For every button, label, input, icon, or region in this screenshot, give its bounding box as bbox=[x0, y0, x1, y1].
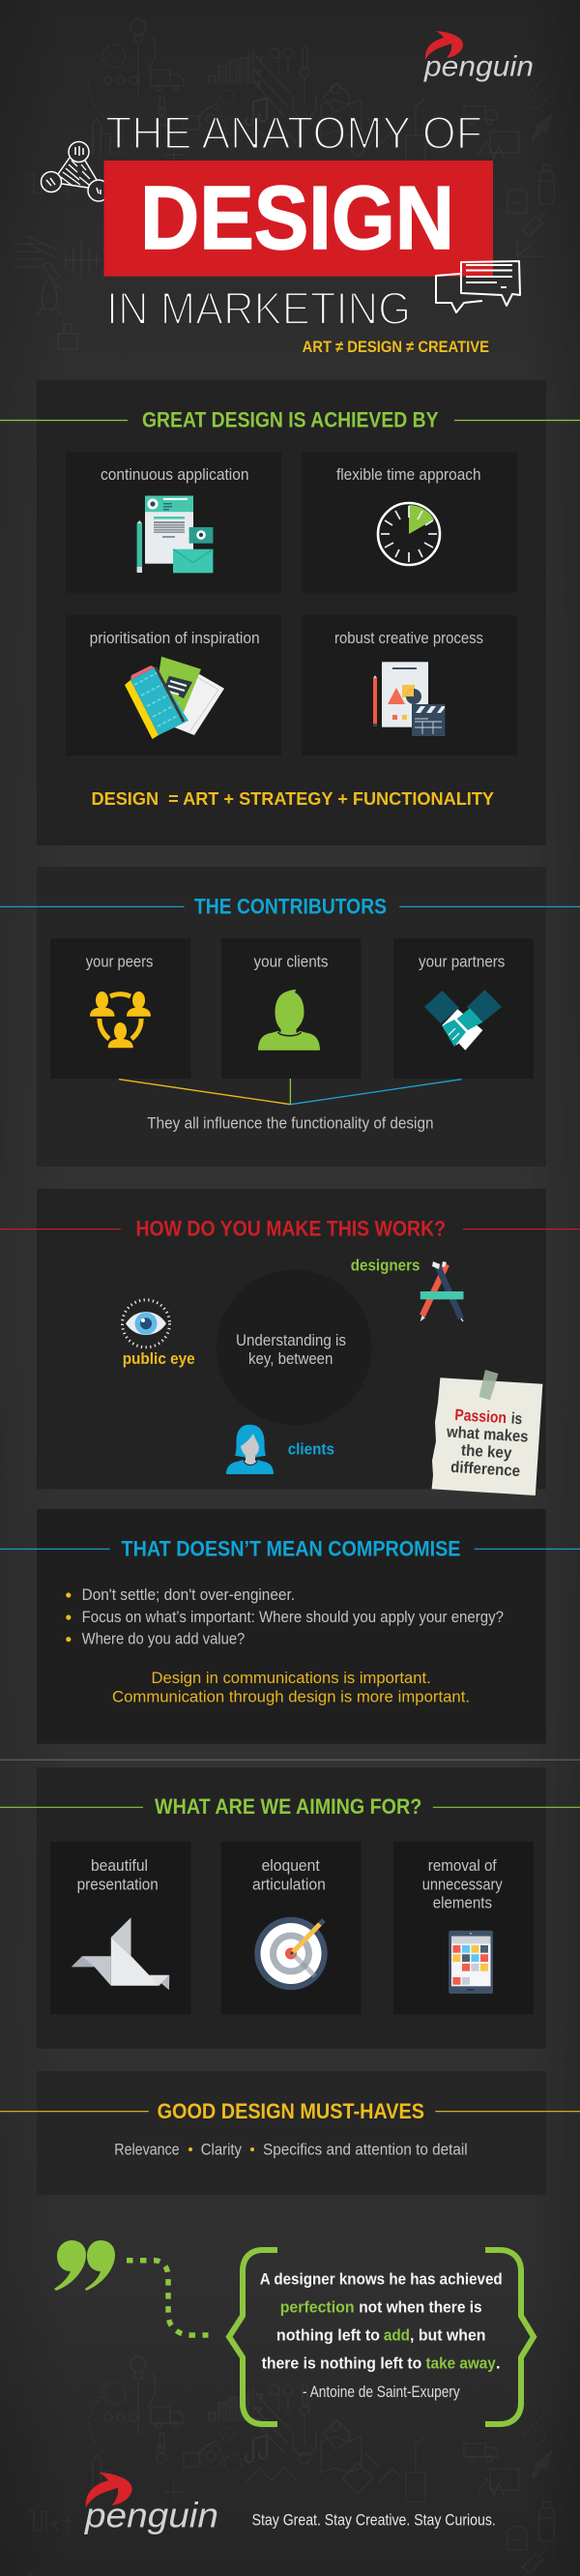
connector lines bbox=[119, 1079, 462, 1105]
bullet list: Where do you add value? bbox=[82, 1631, 245, 1648]
central circle bbox=[217, 1270, 372, 1425]
tagline: ART ≠ DESIGN ≠ CREATIVE bbox=[303, 338, 489, 356]
quote text: add bbox=[384, 2327, 410, 2345]
icon: target bbox=[254, 1917, 328, 1990]
title banner: design: DESIGN bbox=[140, 167, 454, 268]
sticky note: passion: the key bbox=[461, 1441, 513, 1463]
card: prioritisation of inspiration: prioritisation of inspiration bbox=[90, 630, 260, 647]
icon: tablet bbox=[449, 1931, 493, 1994]
icon: clock bbox=[378, 503, 440, 565]
bullet list bbox=[66, 1586, 504, 1648]
heading: good design must-haves: GOOD DESIGN MUST-HAVES bbox=[158, 2099, 424, 2123]
must-have list: Specifics and attention to detail bbox=[263, 2141, 468, 2158]
heading: how do you make this work: HOW DO YOU MAKE THIS WORK? bbox=[135, 1216, 446, 1240]
card: your peers: your peers bbox=[86, 953, 153, 970]
card: robust creative process: robust creative process bbox=[334, 630, 483, 647]
central circle: Understanding is bbox=[236, 1332, 346, 1349]
card: removal of unnecessary elements: unnecessary bbox=[422, 1876, 503, 1893]
quote text: A designer knows he has achieved bbox=[260, 2270, 503, 2288]
must-have list bbox=[114, 2141, 468, 2158]
heading: that doesn't mean compromise: THAT DOESN’T MEAN COMPROMISE bbox=[122, 1537, 460, 1561]
penguin logo: top bbox=[423, 31, 534, 83]
card: flexible time approach: flexible time approach bbox=[336, 466, 481, 484]
card: continuous application bbox=[66, 453, 281, 593]
right brace bbox=[485, 2250, 534, 2424]
card: your partners: your partners bbox=[419, 953, 505, 970]
quote text: not when there is bbox=[359, 2299, 482, 2317]
card: your clients bbox=[221, 938, 362, 1079]
yellow statement bbox=[112, 1670, 470, 1705]
card: flexible time approach bbox=[302, 453, 517, 593]
card: continuous application: continuous application bbox=[101, 466, 249, 484]
sticky note: passion: difference bbox=[450, 1459, 521, 1480]
panel: what are we aiming for bbox=[0, 1767, 580, 2049]
closing tagline: Stay Great. Stay Creative. Stay Curious. bbox=[252, 2512, 496, 2530]
quote text: , but when bbox=[410, 2327, 485, 2345]
sticky note: passion bbox=[432, 1370, 542, 1495]
icon: handshake bbox=[424, 990, 502, 1051]
label: public eye: public eye bbox=[123, 1349, 195, 1368]
card: beautiful presentation: beautiful bbox=[91, 1857, 148, 1875]
equation: DESIGN = ART + STRATEGY + FUNCTIONALITY bbox=[91, 788, 495, 809]
quote text bbox=[260, 2270, 503, 2373]
card: beautiful presentation: presentation bbox=[77, 1876, 159, 1893]
card: removal of unnecessary elements bbox=[393, 1842, 534, 2014]
must-have list: Relevance bbox=[114, 2141, 180, 2158]
icon: client bbox=[258, 990, 320, 1051]
panel: the contributors bbox=[0, 867, 580, 1167]
penguin logo: bottom bbox=[84, 2472, 218, 2534]
dotted connector bbox=[127, 2261, 209, 2335]
heading: the contributors: THE CONTRIBUTORS bbox=[194, 894, 387, 918]
card: eloquent articulation: articulation bbox=[252, 1876, 326, 1893]
icon: molecule sketch bbox=[41, 141, 109, 201]
title: in marketing: IN MARKETING bbox=[106, 283, 411, 335]
panel: great design is achieved by bbox=[0, 380, 580, 845]
sticky note: passion: Passion bbox=[454, 1406, 508, 1427]
title: the anatomy of: THE ANATOMY OF bbox=[105, 108, 482, 159]
panel: good design must-haves bbox=[0, 2071, 580, 2195]
bullet list: Don't settle; don't over-engineer. bbox=[82, 1586, 295, 1604]
sticky note: passion: is bbox=[510, 1410, 523, 1428]
icon: peers bbox=[90, 992, 151, 1048]
card: your clients: your clients bbox=[253, 953, 329, 970]
label: designers: designers bbox=[351, 1257, 420, 1274]
quote text: there is nothing left to bbox=[262, 2355, 421, 2373]
icon: compass and ruler bbox=[420, 1261, 464, 1321]
icon: storyboard bbox=[373, 662, 445, 736]
penguin logo: top: penguin bbox=[423, 50, 534, 83]
quote text: take away bbox=[425, 2355, 497, 2373]
icon: chat bubbles bbox=[436, 261, 520, 312]
sticky note: passion: what makes bbox=[446, 1423, 529, 1446]
card: robust creative process bbox=[302, 615, 517, 755]
quote block bbox=[229, 2250, 534, 2424]
card: removal of unnecessary elements: removal of bbox=[428, 1857, 497, 1875]
quote attribution: - Antoine de Saint-Exupery bbox=[303, 2384, 460, 2401]
heading: great design: GREAT DESIGN IS ACHIEVED BY bbox=[142, 408, 439, 432]
card: your partners bbox=[393, 938, 534, 1079]
yellow statement: Design in communications is important. bbox=[151, 1670, 431, 1687]
must-have list: Clarity bbox=[201, 2141, 243, 2158]
panel: that doesn't mean compromise bbox=[0, 1509, 580, 1744]
central circle: key, between bbox=[248, 1350, 333, 1368]
icon: client woman bbox=[226, 1425, 274, 1474]
card: your peers bbox=[50, 938, 191, 1079]
label: clients: clients bbox=[288, 1440, 334, 1458]
quote text: . bbox=[496, 2355, 501, 2373]
icon: origami bird bbox=[72, 1917, 169, 1990]
caption: They all influence the functionality of design bbox=[147, 1115, 434, 1133]
card: beautiful presentation bbox=[50, 1842, 191, 2014]
quote text: nothing left to bbox=[276, 2327, 380, 2345]
icon: notebooks bbox=[125, 657, 224, 739]
bullet list: Focus on what’s important: Where should you apply your energy? bbox=[82, 1609, 504, 1626]
penguin logo: bottom: penguin bbox=[84, 2496, 218, 2534]
card: eloquent articulation bbox=[221, 1842, 362, 2014]
left brace bbox=[229, 2250, 277, 2424]
heading: what are we aiming for: WHAT ARE WE AIMING FOR? bbox=[155, 1794, 421, 1819]
card: removal of unnecessary elements: elements bbox=[433, 1894, 492, 1911]
icon: eye bbox=[122, 1300, 170, 1347]
card: prioritisation of inspiration bbox=[66, 615, 281, 755]
card: eloquent articulation: eloquent bbox=[262, 1857, 320, 1875]
icon: stationery bbox=[137, 496, 213, 573]
yellow statement: Communication through design is more important. bbox=[112, 1688, 470, 1705]
panel: how do you make this work bbox=[0, 1189, 580, 1489]
icon: quotation marks bbox=[54, 2240, 115, 2291]
quote text: perfection bbox=[280, 2299, 355, 2317]
